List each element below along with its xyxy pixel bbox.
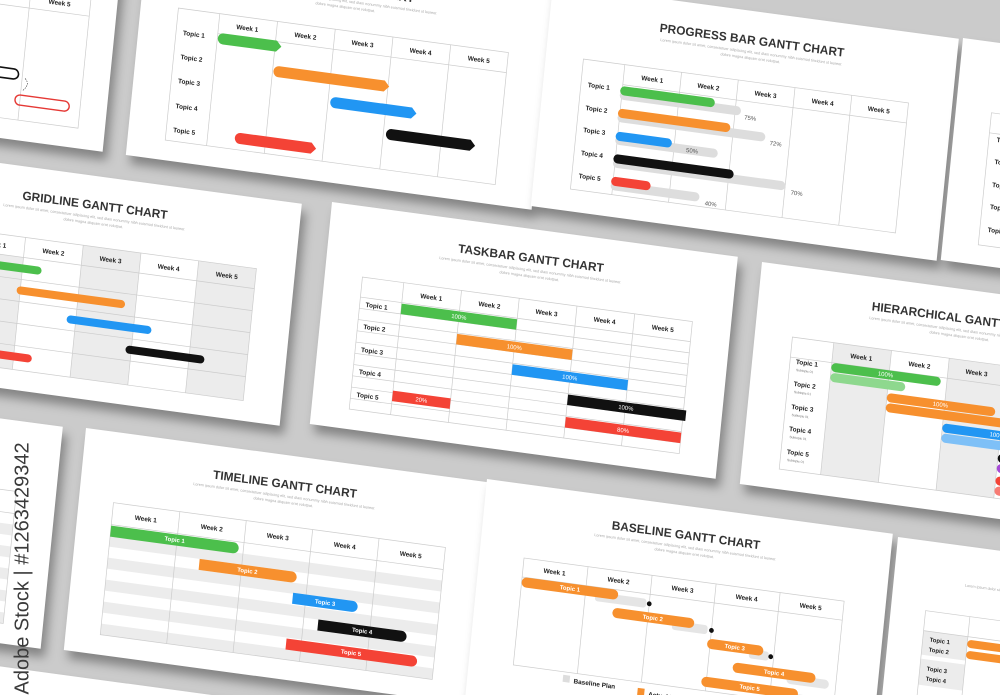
slide: taskbar gantt chart: Week 4 <box>593 316 616 326</box>
slide: gridline gantt chart: Week 4 <box>157 263 180 273</box>
slide: hierarchical gantt chart: Topic 5 <box>787 449 810 459</box>
slide: taskbar gantt chart: Topic 1 <box>365 302 388 312</box>
description: Lorem ipsum dolor sit amet, consectetuer adipiscing elit, sed diam nonummy nibh euismod tincidunt ut laoreet <box>193 482 375 511</box>
outline bars <box>0 60 72 112</box>
slide: hierarchical gantt chart: Week 1 <box>850 353 873 363</box>
legend <box>562 675 698 695</box>
description: dolore magna aliquam erat volutpat. <box>654 547 714 559</box>
slide: bottom-right partial: Topic 1 <box>929 638 951 646</box>
slide: arrow gantt chart: Week 2 <box>294 32 317 42</box>
percentages: 70% <box>790 190 803 198</box>
slide: hierarchical gantt chart: 100% <box>878 371 894 380</box>
slide: baseline gantt chart: Topic 2 <box>642 615 664 623</box>
slide: timeline gantt chart: Topic 4 <box>352 628 373 636</box>
task bars <box>392 304 693 443</box>
percentages <box>681 108 810 220</box>
slide: taskbar gantt chart: Topic 4 <box>359 369 382 379</box>
slide: timeline gantt chart: Topic 2 <box>237 568 258 576</box>
title: TIMELINE GANTT CHART <box>212 468 358 501</box>
slide: hierarchical gantt chart: Week 2 <box>908 361 931 371</box>
slide: timeline gantt chart: Topic 3 <box>315 599 336 608</box>
slide: taskbar gantt chart: Week 5 <box>651 324 674 334</box>
progress bars <box>610 86 793 213</box>
slide: progress bar gantt chart: Topic 1 <box>587 82 610 92</box>
slide: baseline gantt chart: Topic 5 <box>739 684 761 693</box>
slide: gridline gantt chart: Week 3 <box>99 256 122 266</box>
slide: hierarchical gantt chart: 100% <box>932 402 949 410</box>
slide: progress bar gantt chart: Week 1 <box>641 75 664 85</box>
slide: arrow gantt chart: Week 5 <box>467 55 490 65</box>
slide: baseline gantt chart <box>465 479 893 695</box>
slide: hierarchical gantt chart: Subtopic 01 <box>796 368 814 374</box>
slide: timeline gantt chart: Topic 5 <box>341 649 362 658</box>
slide: timeline gantt chart: Week 4 <box>333 542 356 552</box>
slide: arrow gantt chart: Topic 4 <box>175 103 198 113</box>
slide: hierarchical gantt chart: Subtopic 01 <box>789 435 807 441</box>
slide: baseline gantt chart: Topic 3 <box>724 644 746 653</box>
slide: progress bar gantt chart: Week 4 <box>811 98 834 108</box>
slide: taskbar gantt chart: 100% <box>618 405 634 413</box>
watermark: Adobe Stock | #1263429342 <box>12 442 34 694</box>
description: dolore magna aliquam erat volutpat. <box>63 217 123 229</box>
title: BASELINE GANTT CHART <box>611 518 762 552</box>
slide: baseline gantt chart: Week 5 <box>799 602 822 612</box>
slide: arrow gantt chart: Topic 5 <box>173 127 196 137</box>
milestone dots <box>643 601 777 659</box>
description: dolore magna aliquam erat volutpat. <box>720 52 780 64</box>
slide: bottom-right partial: Topic 4 <box>925 677 947 685</box>
description: dolore magna aliquam erat volutpat. <box>253 496 313 508</box>
slide: timeline gantt chart: Topic 1 <box>164 536 186 545</box>
description: Lorem ipsum dolor sit amet, consectetuer adipiscing elit, sed diam nonummy nibh euismod tincidunt ut laoreet <box>660 38 842 67</box>
slide: taskbar gantt chart: 20% <box>415 397 428 405</box>
legend: Baseline Plan <box>573 678 615 691</box>
slide: progress bar gantt chart: Week 5 <box>867 106 890 116</box>
slide: far right partial <box>941 38 1000 315</box>
slide: baseline gantt chart: Week 1 <box>543 568 566 578</box>
slide: progress bar gantt chart: Topic 5 <box>578 173 601 183</box>
slide: hierarchical gantt chart: Week 3 <box>965 369 988 379</box>
slide: timeline gantt chart <box>64 428 492 695</box>
slide: arrow gantt chart: Topic 3 <box>178 78 201 88</box>
slide: taskbar gantt chart: Topic 3 <box>361 347 384 357</box>
slide: progress bar gantt chart: Week 3 <box>754 90 777 100</box>
slide: taskbar gantt chart: 100% <box>506 344 523 352</box>
slide: hierarchical gantt chart: Subtopic 01 <box>791 413 809 419</box>
slide: bottom-right partial: Topic 3 <box>926 667 948 675</box>
slide: baseline gantt chart: Topic 1 <box>559 585 581 594</box>
slide: left bottom partial <box>0 372 63 649</box>
arrow bars <box>208 33 483 175</box>
description: Lorem ipsum dolor sit amet, consectetuer adipiscing elit, sed diam nonummy nibh euismod tincidunt ut laoreet <box>439 256 621 285</box>
description: Lorem ipsum dolor sit amet, consectetuer adipiscing elit, sed diam nonummy nibh euismod tincidunt ut laoreet <box>3 203 185 232</box>
slide: arrow gantt chart: Week 1 <box>236 24 259 34</box>
slide: bottom-left partial <box>0 644 240 695</box>
percentages: 72% <box>769 141 782 149</box>
title: PROGRESS BAR GANTT CHART <box>659 21 846 60</box>
description: Lorem ipsum dolor sit amet, consectetuer adipiscing elit, sed diam nonummy nibh euismod tincidunt ut laoreet <box>594 533 776 562</box>
slide: hierarchical gantt chart: Topic 1 <box>796 359 819 369</box>
slide: bottom-right partial: Topic 2 <box>928 648 950 656</box>
slide: hierarchical gantt chart: Subtopic 01 <box>794 390 811 396</box>
slide: progress bar gantt chart <box>531 0 959 261</box>
slide: arrow gantt chart <box>126 0 554 210</box>
slide: gridline gantt chart: Week 2 <box>42 248 65 258</box>
orange bars <box>966 640 1000 677</box>
slide: timeline gantt chart: Week 3 <box>266 533 289 543</box>
slide: arrow gantt chart: Topic 2 <box>180 54 203 64</box>
title: GRIDLINE GANTT CHART <box>22 188 169 222</box>
slide: top-left partial outline gantt <box>0 0 125 152</box>
slide: timeline gantt chart: Week 1 <box>134 515 157 525</box>
slide: taskbar gantt chart: Topic 2 <box>363 324 386 334</box>
slide: gridline gantt chart: Week 5 <box>215 271 238 281</box>
slide: hierarchical gantt chart: Subtopic 01 <box>787 458 805 464</box>
description: dolore magna aliquam erat volutpat. <box>499 270 559 282</box>
slide: bottom-right partial <box>876 537 1000 695</box>
slide: hierarchical gantt chart: Topic 3 <box>791 404 814 414</box>
percentages: 40% <box>704 201 717 209</box>
slide: taskbar gantt chart: 80% <box>617 428 630 435</box>
slide: progress bar gantt chart: Topic 4 <box>581 150 604 160</box>
slide: taskbar gantt chart: Week 2 <box>478 301 501 311</box>
actual bars <box>514 577 822 695</box>
bars <box>0 254 211 386</box>
slide: baseline gantt chart: Week 4 <box>735 594 758 604</box>
slide: hierarchical gantt chart: Topic 2 <box>793 381 816 391</box>
slide: taskbar gantt chart <box>310 202 738 479</box>
title: TASKBAR GANTT CHART <box>458 241 605 275</box>
slide: baseline gantt chart: Week 3 <box>671 585 694 595</box>
bar pairs <box>821 363 1000 508</box>
slide: progress bar gantt chart: Topic 3 <box>583 127 606 137</box>
slide: taskbar gantt chart: Week 1 <box>420 293 443 303</box>
slide: timeline gantt chart: Week 2 <box>200 524 223 534</box>
slide: progress bar gantt chart: Week 2 <box>697 83 720 93</box>
description: dolore magna aliquam erat volutpat. <box>315 1 375 13</box>
slide: taskbar gantt chart: Week 3 <box>535 309 558 319</box>
slide: progress bar gantt chart: Topic 2 <box>585 105 608 115</box>
timeline bars <box>101 526 426 667</box>
percentages: 50% <box>686 148 699 156</box>
slide: taskbar gantt chart: 100% <box>562 375 578 383</box>
slide: arrow gantt chart: Week 3 <box>351 40 374 50</box>
slide: gridline gantt chart <box>0 149 302 426</box>
slide: timeline gantt chart: Week 5 <box>399 550 422 560</box>
percentages: 75% <box>744 115 757 123</box>
slide: taskbar gantt chart: 100% <box>451 314 467 322</box>
slide: arrow gantt chart: Week 4 <box>409 47 432 57</box>
description: dolore magna aliquam erat volutpat. <box>929 330 989 342</box>
slide: taskbar gantt chart: Topic 5 <box>356 392 379 402</box>
slide: baseline gantt chart: Topic 4 <box>764 669 785 678</box>
slide: baseline gantt chart: Week 2 <box>607 576 630 586</box>
slide: arrow gantt chart: Topic 1 <box>183 30 206 40</box>
slide: hierarchical gantt chart <box>740 262 1000 539</box>
slide: hierarchical gantt chart: Topic 4 <box>789 426 812 436</box>
baseline tracks <box>587 592 835 695</box>
